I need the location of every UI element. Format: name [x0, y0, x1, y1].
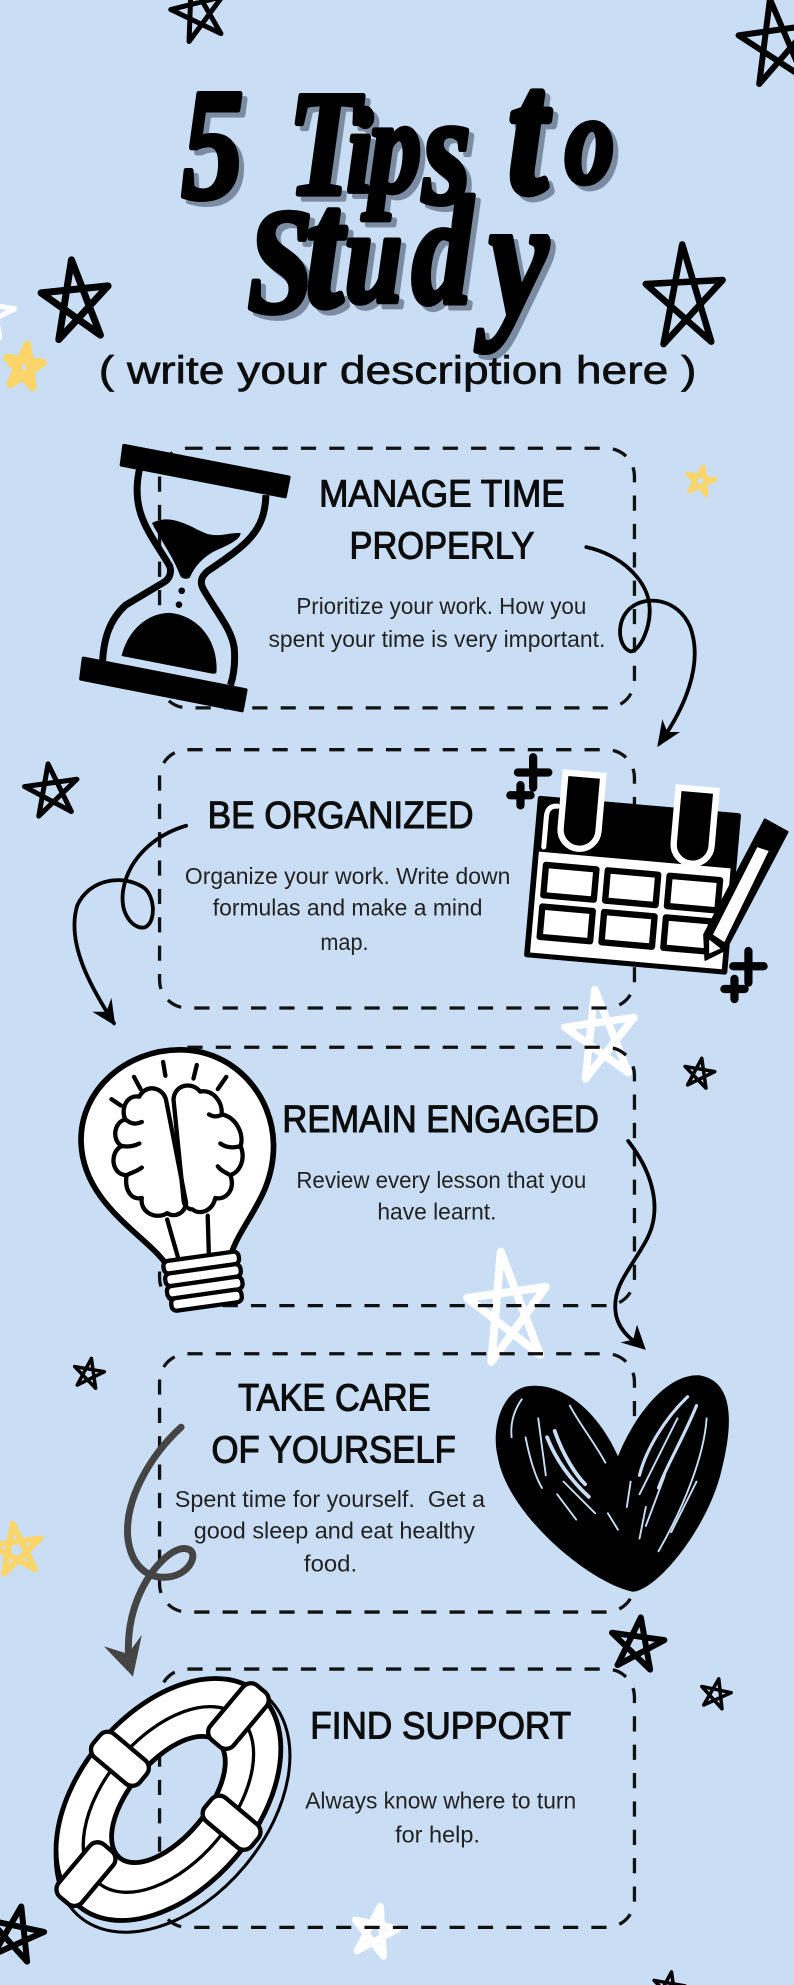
icon: calendar with pencil	[510, 757, 788, 999]
dashed box	[160, 1669, 634, 1927]
icon: life ring	[2, 1629, 339, 1977]
heading second line: OF YOURSELF	[211, 1430, 456, 1472]
title line one: p	[362, 73, 421, 220]
title line two: d	[412, 165, 474, 336]
body text: Organize your work. Write down	[185, 863, 510, 889]
title line one: o	[565, 70, 614, 210]
panel: take care of yourself	[160, 1354, 634, 1612]
star: black right of fifth box	[698, 1676, 733, 1710]
star: yellow lower left	[0, 1520, 44, 1575]
star: white left edge	[0, 281, 18, 340]
heading: MANAGE TIME	[319, 474, 565, 516]
arrow: first box to second box	[586, 547, 695, 747]
dashed box	[160, 750, 634, 1008]
heading second line: PROPERLY	[350, 525, 534, 567]
body text third line: food.	[304, 1551, 357, 1577]
star: black left second tip	[22, 760, 81, 817]
panel: be organized	[160, 750, 634, 1008]
panel: remain engaged	[160, 1047, 634, 1306]
icon: scribbled heart	[496, 1375, 729, 1592]
body text: Always know where to turn	[305, 1787, 576, 1813]
star: black bottom right	[651, 1969, 687, 1985]
ring	[11, 1636, 326, 1963]
title line one: t	[509, 35, 550, 229]
body text: Spent time for yourself. Get a	[175, 1486, 486, 1512]
panel: manage time properly	[160, 448, 634, 708]
star: black right of third box	[682, 1056, 717, 1089]
calendar body	[524, 770, 743, 975]
arrow: second box to third box	[74, 826, 186, 1026]
heading: REMAIN ENGAGED	[282, 1099, 599, 1141]
body text second line: spent your time is very important.	[268, 626, 605, 652]
heading: FIND SUPPORT	[310, 1706, 571, 1748]
panel: find support	[160, 1669, 634, 1927]
straps	[4, 1629, 333, 1970]
body text: Prioritize your work. How you	[296, 593, 586, 619]
body text second line: for help.	[395, 1822, 480, 1848]
star: black bottom left	[0, 1901, 48, 1964]
body text: Review every lesson that you	[296, 1167, 586, 1193]
rope outline	[8, 1635, 337, 1977]
body text third line: map.	[320, 929, 369, 955]
dashed box	[160, 1047, 634, 1306]
arrow: fourth box to fifth box	[104, 1427, 193, 1677]
dashed box	[160, 1354, 634, 1612]
pencil	[704, 819, 788, 960]
body text second line: have learnt.	[377, 1198, 496, 1224]
title line one: 5	[182, 57, 243, 232]
arrow: third box to fourth box	[615, 1141, 654, 1350]
star: top centre	[165, 0, 231, 44]
title line two: S	[248, 179, 313, 344]
dashed box	[160, 448, 634, 708]
title line two: y	[475, 164, 549, 353]
star: left of title	[38, 256, 113, 341]
title line one: T	[288, 61, 364, 226]
bulb base	[163, 1251, 245, 1312]
icon: lightbulb with brain	[81, 1050, 274, 1312]
star: white bottom	[349, 1902, 402, 1958]
icon: hourglass	[81, 446, 289, 710]
plus signs	[510, 757, 764, 999]
ring highlight	[50, 1675, 287, 1924]
body text second line: formulas and make a mind	[213, 895, 482, 921]
body text second line: good sleep and eat healthy	[194, 1518, 475, 1544]
star: top right	[734, 0, 794, 86]
heading: BE ORGANIZED	[208, 795, 474, 837]
star: white on second box	[560, 985, 641, 1081]
star: yellow right	[684, 463, 718, 496]
bulb outline	[81, 1050, 274, 1264]
star: white on third box	[461, 1246, 555, 1364]
star: black left of fourth box	[72, 1356, 106, 1389]
heading: TAKE CARE	[238, 1378, 431, 1420]
star: yellow left	[4, 342, 45, 388]
title line two: u	[345, 183, 402, 330]
title line one: s	[422, 62, 471, 237]
title	[182, 35, 614, 353]
star: right of title	[644, 242, 726, 345]
description: ( write your description here )	[99, 349, 696, 393]
star: black above fifth box	[608, 1614, 667, 1671]
brain	[111, 1062, 243, 1264]
title line one: i	[347, 86, 373, 218]
title line two: t	[306, 157, 346, 342]
